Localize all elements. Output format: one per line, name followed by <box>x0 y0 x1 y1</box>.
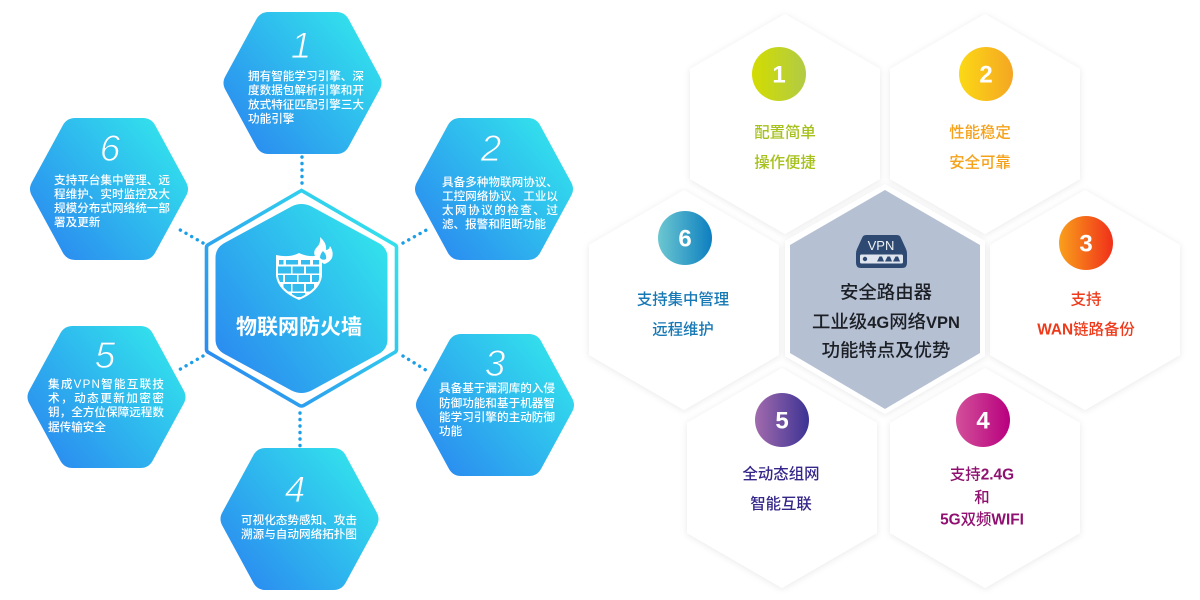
hexagon 1: 1 <box>291 25 311 66</box>
cell 6 <box>589 190 779 410</box>
cell 2: 安全可靠 <box>949 152 1011 172</box>
hexagon 6: 规模分布式网络统一部 <box>54 201 170 215</box>
cell 5: 全动态组网 <box>743 464 819 483</box>
cell 3: 支持 <box>1071 290 1101 308</box>
hexagon 3: 功能 <box>439 424 463 438</box>
cell 3: 3 <box>1079 230 1093 258</box>
hexagon 4: 可视化态势感知、攻击 <box>241 513 357 527</box>
hexagon 6: 署及更新 <box>54 215 101 229</box>
hexagon 4: 溯源与自动网络拓扑图 <box>241 527 357 541</box>
cell 4: 和 <box>974 488 990 506</box>
hexagon 6: 支持平台集中管理、远 <box>54 173 170 187</box>
hexagon 3: 能学习引擎的主动防御 <box>439 410 555 424</box>
hexagon 2: 滤、报警和阻断功能 <box>442 217 546 231</box>
center cell: VPN router features: 工业级4G网络VPN <box>812 311 960 332</box>
hexagon 4: 4 <box>285 469 305 510</box>
cell 1: 配置简单 <box>754 124 816 142</box>
icon: shield with flame <box>276 237 333 300</box>
cell 6: 支持集中管理 <box>637 290 729 308</box>
cell 4: 支持2.4G <box>950 466 1014 484</box>
icon: VPN router <box>856 235 907 268</box>
cell 2: 性能稳定 <box>949 122 1011 142</box>
hexagon 1: 拥有智能学习引擎、深 <box>248 69 364 83</box>
cell 5 <box>687 368 877 588</box>
cell 1: 操作便捷 <box>754 154 816 172</box>
icon: VPN router: VPN <box>868 238 894 253</box>
cell 2: 2 <box>979 62 993 88</box>
cell 6: 6 <box>678 226 692 252</box>
center cell: VPN router features <box>785 184 985 414</box>
cell 4: 5G双频WIFI <box>940 510 1024 528</box>
hexagon 2: 太网协议的检查、过 <box>442 203 558 217</box>
left diagram: IoT firewall <box>28 12 574 590</box>
cell 5: 智能互联 <box>750 495 812 513</box>
right diagram: VPN router <box>589 14 1180 588</box>
hexagon 5: 钥，全方位保障远程数 <box>48 405 164 419</box>
hexagon 5: 5 <box>95 335 116 376</box>
hexagon 1 <box>224 12 382 154</box>
hexagon 5 <box>28 326 186 468</box>
hexagon 2: 2 <box>480 128 502 169</box>
hexagon 2: 工控网络协议、工业以 <box>442 189 558 203</box>
cell 3 <box>990 190 1180 410</box>
hexagon 6: 6 <box>100 128 121 169</box>
cell 1: 1 <box>772 62 786 88</box>
dotted connectors <box>175 157 430 446</box>
hexagon 2: 具备多种物联网协议、 <box>442 175 558 189</box>
hexagon 4 <box>220 448 378 590</box>
hexagon 3: 3 <box>485 343 506 384</box>
hexagon 5: 据传输安全 <box>48 420 106 434</box>
hexagon 6: 程维护、实时监控及大 <box>54 187 170 201</box>
hexagon 1: 功能引擎 <box>248 112 295 126</box>
cell 4: 4 <box>976 408 990 434</box>
cell 1 <box>690 14 880 234</box>
heading: 安全路由器 <box>840 282 932 302</box>
hexagon 3: 具备基于漏洞库的入侵 <box>439 381 555 395</box>
cell 3: WAN链路备份 <box>1037 320 1135 338</box>
center cell: VPN router features: 功能特点及优势 <box>822 340 950 360</box>
hexagon 6 <box>30 118 188 260</box>
hexagon 5: 术，动态更新加密密 <box>48 391 164 405</box>
hexagon 3 <box>416 334 574 476</box>
cell 5: 5 <box>775 408 789 434</box>
hexagon 1: 度数据包解析引擎和开 <box>248 83 364 97</box>
hexagon 1: 放式特征匹配引擎三大 <box>248 98 364 112</box>
heading: 物联网防火墙 <box>236 316 362 339</box>
cell 6: 远程维护 <box>652 320 714 338</box>
center hexagon: IoT firewall <box>206 190 396 406</box>
cell 4 <box>890 368 1080 588</box>
hexagon 3: 防御功能和基于机器智 <box>439 396 555 410</box>
cell 2 <box>890 14 1080 234</box>
hexagon 2 <box>415 118 573 260</box>
hexagon 5: 集成VPN智能互联技 <box>48 377 164 391</box>
